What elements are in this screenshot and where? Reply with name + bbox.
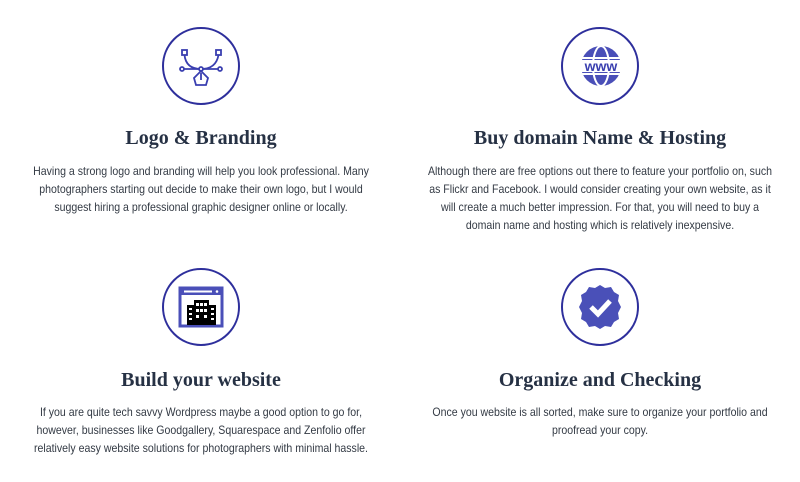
text: domain <box>428 164 772 232</box>
text: organize <box>432 405 768 437</box>
text: domain: Although there are free options out there to feature your portfolio on, such <box>428 164 772 178</box>
icon: check badge <box>561 268 639 346</box>
text: organize: proofread your copy. <box>552 423 648 437</box>
text: website: relatively easy website solutions for photographers with minimal hassle. <box>34 441 368 455</box>
title: website: Build your website <box>121 369 281 391</box>
text: logo: suggest hiring a professional graphic designer online or locally. <box>54 200 348 214</box>
text: website <box>34 405 368 455</box>
text: domain: will create a much better impression. For that, you will need to buy a <box>441 200 759 214</box>
title: logo: Logo & Branding <box>125 127 277 149</box>
icon: pen tool <box>162 27 240 105</box>
icon: www globe: www <box>584 58 617 74</box>
text: website: however, businesses like Goodgallery, Squarespace and Zenfolio offer <box>37 423 365 437</box>
text: logo: Having a strong logo and branding will help you look professional. Many <box>33 164 369 178</box>
icon: www globe <box>561 27 639 105</box>
text: domain: as Flickr and Facebook. I would consider creating your own website, as it <box>429 182 771 196</box>
title: domain: Buy domain Name & Hosting <box>474 127 726 149</box>
icon: website <box>162 268 240 346</box>
text: organize: Once you website is all sorted, make sure to organize your portfolio and <box>432 405 768 419</box>
title: organize: Organize and Checking <box>499 369 701 391</box>
text: logo <box>33 164 369 214</box>
text: domain: domain name and hosting which is relatively inexpensive. <box>466 218 734 232</box>
text: logo: photographers starting out decide to make their own logo, but I would <box>39 182 363 196</box>
text: website: If you are quite tech savvy Wordpress maybe a good option to go for, <box>40 405 362 419</box>
